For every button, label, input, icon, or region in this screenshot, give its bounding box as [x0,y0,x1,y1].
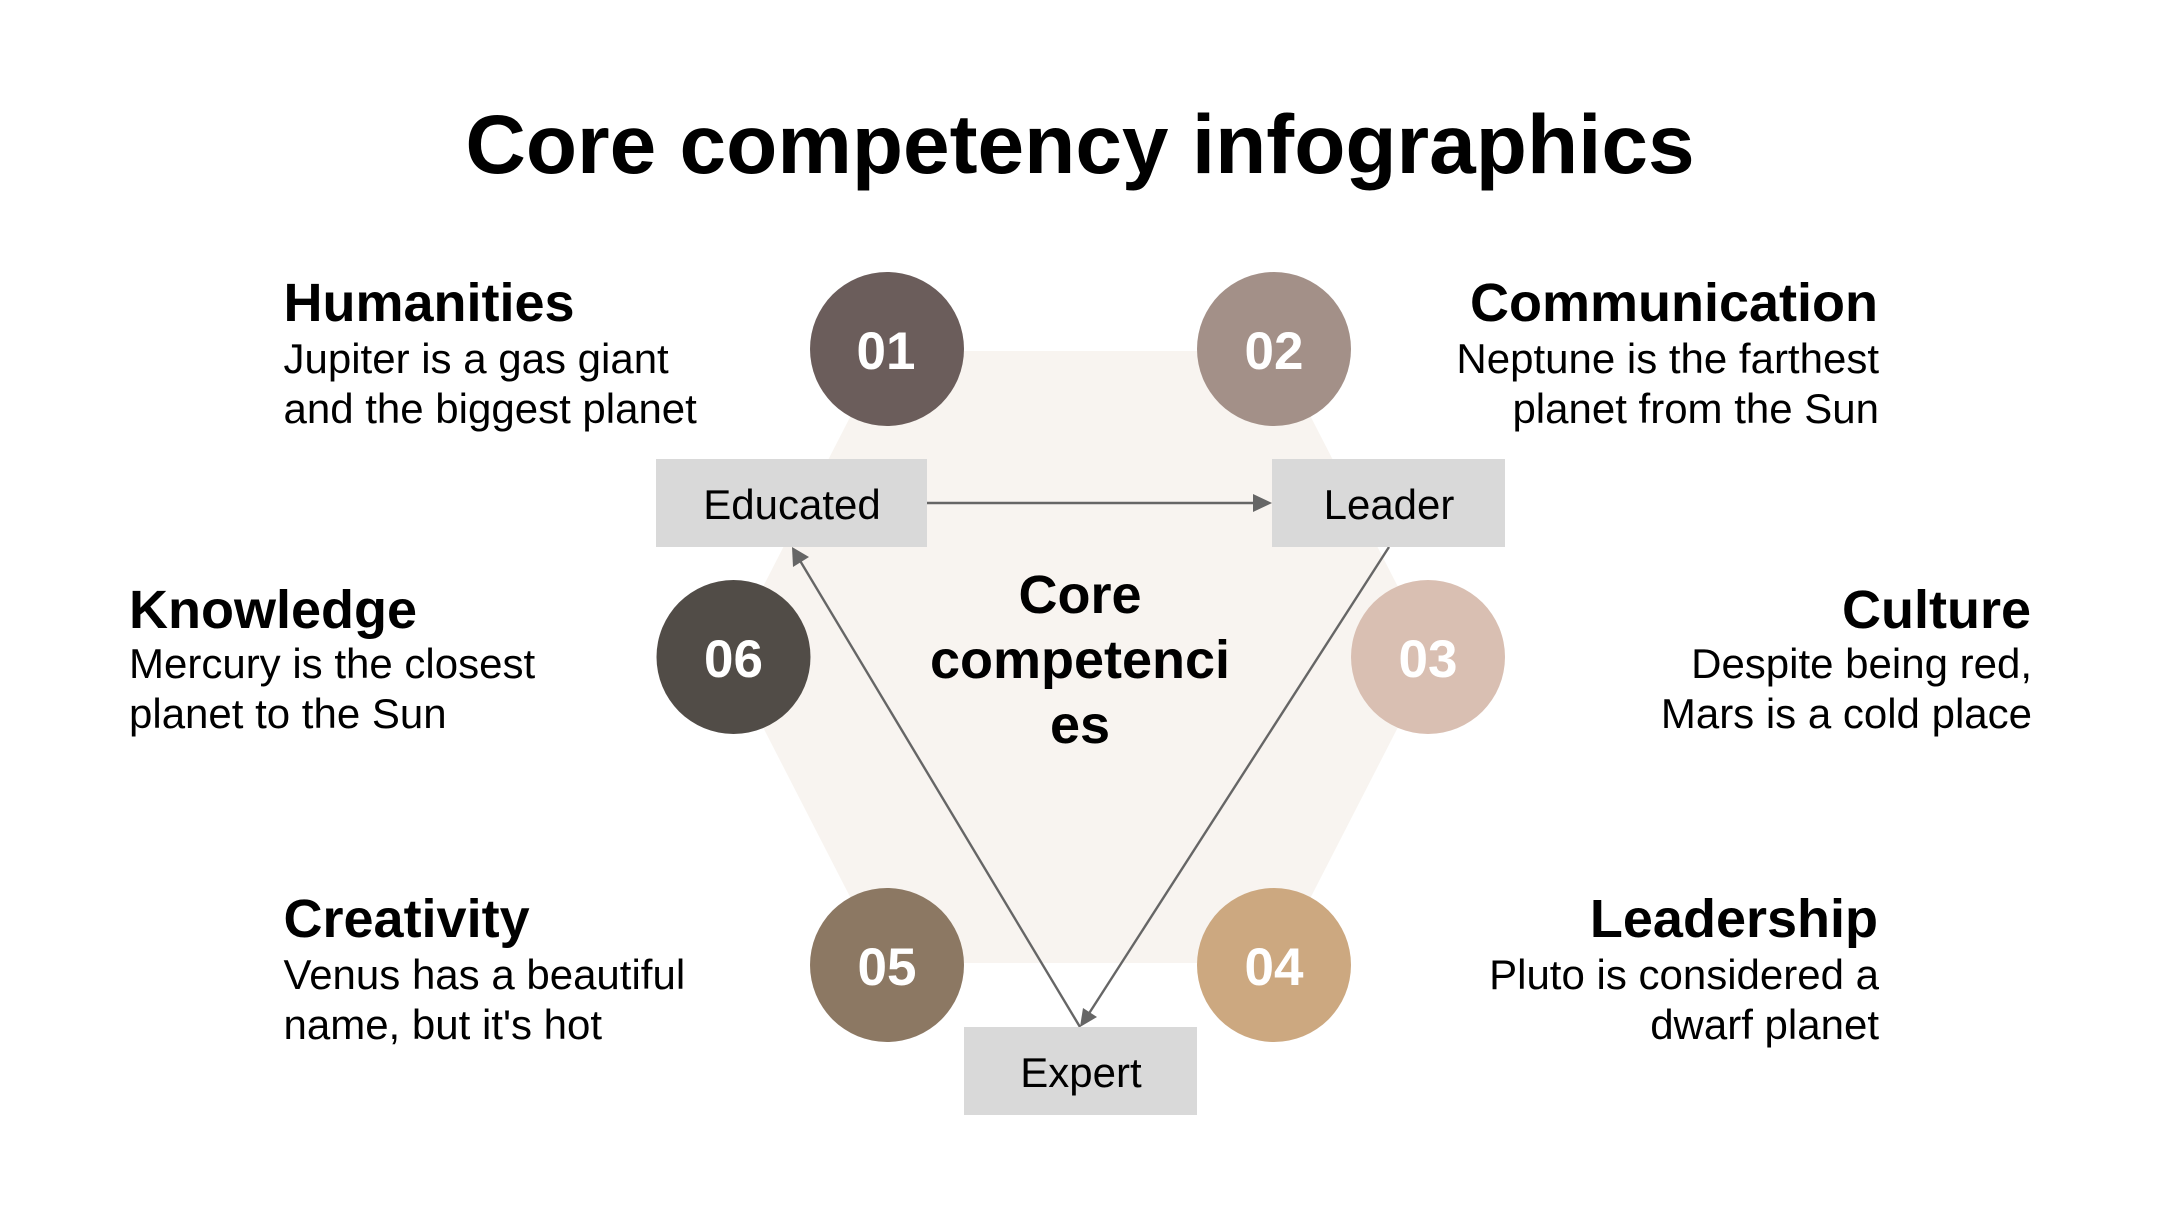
text block: creativity: Venus has a beautiful [284,951,685,998]
arrow: expert to educated [792,547,1080,1027]
text block: communication: Communication [1470,273,1878,333]
text block: creativity [284,889,685,1048]
text block: creativity: Creativity [284,889,530,949]
text block: culture: Culture [1842,580,2031,640]
text block: creativity: name, but it's hot [284,1001,602,1048]
text block: leadership: dwarf planet [1650,1001,1879,1048]
text block: humanities: Jupiter is a gas giant [284,335,669,382]
circle 01: 01 [857,322,915,381]
box: leader [1272,459,1505,547]
text block: knowledge: planet to the Sun [129,690,447,737]
center label: Core [1018,565,1142,625]
text block: communication: planet from the Sun [1512,385,1879,432]
text block: knowledge: Mercury is the closest [129,640,535,687]
text block: humanities: Humanities [284,273,575,333]
circle 05 [810,888,964,1042]
circle 06: 06 [704,630,763,689]
circle 01 [810,272,964,426]
text block: communication: Neptune is the farthest [1456,335,1879,382]
circle 03 [1351,580,1505,734]
circle 02: 02 [1245,322,1303,381]
title: Core competency infographics [465,97,1695,191]
circle 05: 05 [858,938,916,997]
text block: leadership: Pluto is considered a [1489,951,1880,998]
text block: communication [1456,273,1879,432]
text block: knowledge [129,580,535,737]
text block: knowledge: Knowledge [129,580,417,640]
arrow: educated to leader [927,494,1272,512]
box: leader: Leader [1324,481,1454,528]
center label [930,565,1230,755]
text block: humanities [284,273,697,432]
text block: culture: Mars is a cold place [1661,690,2032,737]
arrow: leader to expert [1080,547,1389,1027]
circle 03: 03 [1399,630,1457,689]
box: expert: Expert [1020,1049,1142,1096]
box: expert [964,1027,1197,1115]
center label: competenci [930,630,1230,690]
text block: leadership [1489,889,1880,1048]
circle 02 [1197,272,1351,426]
text block: humanities: and the biggest planet [284,385,697,432]
center label: es [1050,695,1110,755]
central hexagon [727,351,1434,963]
circle 04: 04 [1245,938,1304,997]
text block: culture: Despite being red, [1691,640,2032,687]
text block: culture [1661,580,2032,737]
box: educated [656,459,927,547]
circle 04 [1197,888,1351,1042]
circle 06 [656,580,810,734]
text block: leadership: Leadership [1590,889,1878,949]
box: educated: Educated [703,481,881,528]
